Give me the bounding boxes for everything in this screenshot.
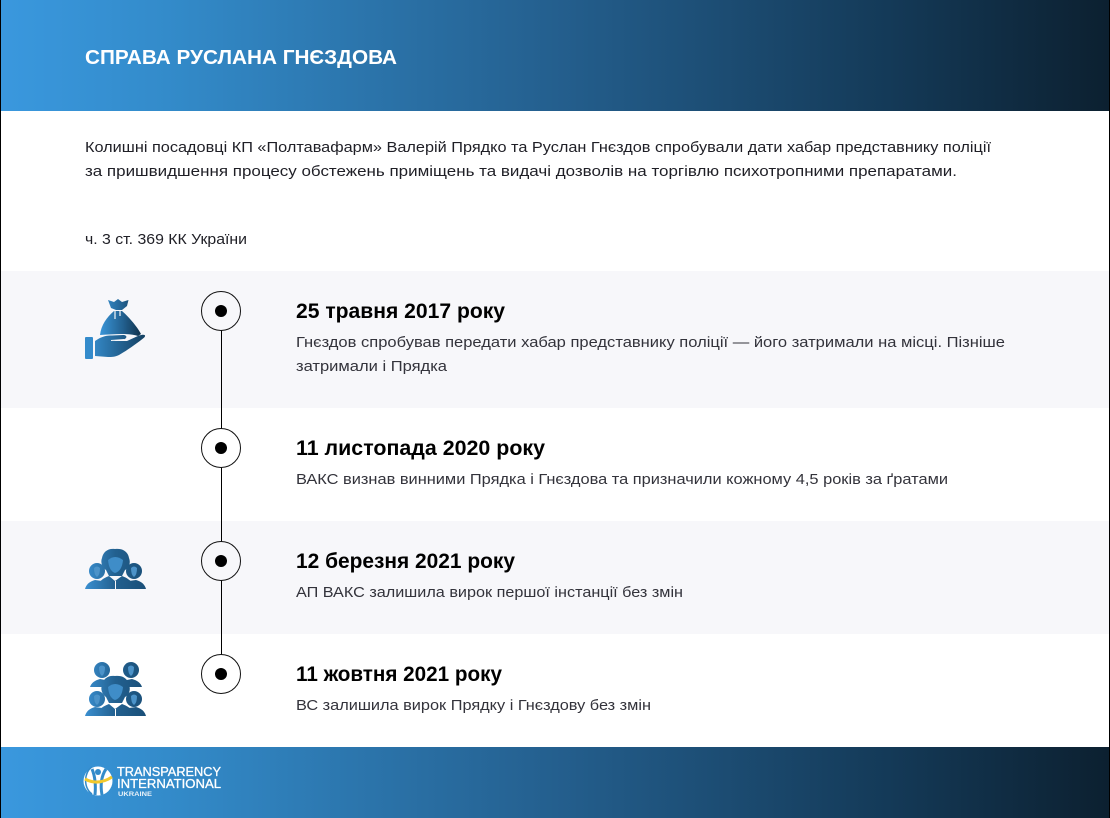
- icon: group of five people: [85, 662, 146, 716]
- timeline marker 4: [202, 654, 240, 694]
- event 1: 25 травня 2017 року: [296, 300, 505, 323]
- event 2: [296, 437, 948, 488]
- event 3: [296, 550, 683, 601]
- logo: Transparency International Ukraine: UKRAINE: [118, 791, 153, 798]
- intro text: [85, 139, 992, 180]
- event 1: [296, 300, 1005, 375]
- panel: row 3 background: [1, 521, 1109, 634]
- event 3: АП ВАКС залишила вирок першої інстанції без змін: [296, 584, 683, 601]
- intro text: за пришвидшення процесу обстежень приміщень та видачі дозволів на торгівлю психотропними препаратами.: [85, 163, 957, 180]
- event 1: затримали і Прядка: [296, 358, 448, 375]
- logo: Transparency International Ukraine: TRANSPARENCY: [117, 765, 222, 779]
- intro text: Колишні посадовці КП «Полтавафарм» Валерій Прядко та Руслан Гнєздов спробували дати хабар представнику поліції: [85, 139, 992, 156]
- event 2: ВАКС визнав винними Прядка і Гнєздова та призначили кожному 4,5 років за ґратами: [296, 471, 948, 488]
- event 2: 11 листопада 2020 року: [296, 437, 545, 460]
- panel: row 1 background: [1, 271, 1109, 408]
- event 4: [296, 663, 651, 714]
- icon: hand holding money bag: [85, 299, 145, 359]
- timeline marker 1: [202, 292, 240, 330]
- logo: Transparency International Ukraine: [84, 765, 222, 798]
- panel: header band: [1, 0, 1109, 111]
- panel: footer band: [1, 747, 1109, 818]
- logo: Transparency International Ukraine: INTERNATIONAL: [117, 777, 221, 791]
- icon: group of three people: [85, 549, 146, 589]
- event 3: 12 березня 2021 року: [296, 550, 515, 573]
- title: СПРАВА РУСЛАНА ГНЄЗДОВА: [85, 47, 397, 69]
- timeline marker 3: [202, 542, 240, 580]
- event 1: Гнєздов спробував передати хабар представнику поліції — його затримали на місці. Пізніше: [296, 334, 1005, 351]
- timeline marker 2: [202, 428, 240, 468]
- legal article reference: ч. 3 ст. 369 КК України: [85, 231, 247, 248]
- event 4: ВС залишила вирок Прядку і Гнєздову без змін: [296, 697, 651, 714]
- timeline line: [220, 311, 222, 674]
- event 4: 11 жовтня 2021 року: [296, 663, 502, 686]
